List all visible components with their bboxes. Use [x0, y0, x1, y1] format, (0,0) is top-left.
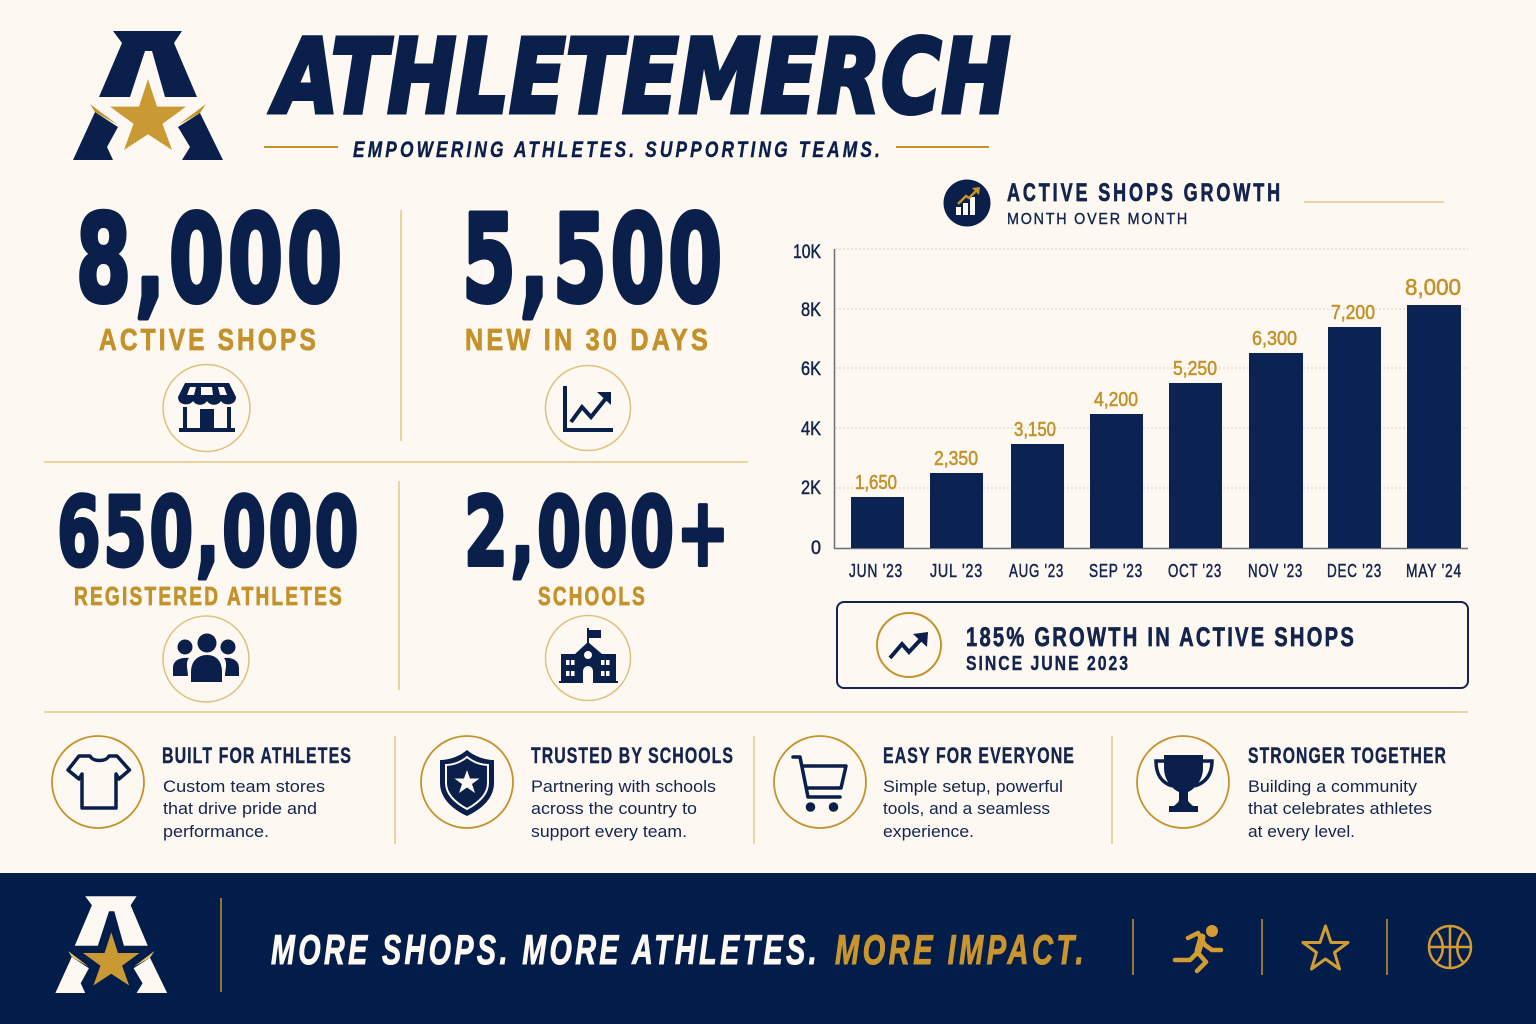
footer slogan: MORE IMPACT. [835, 926, 1087, 973]
stat: active shops: ACTIVE SHOPS [99, 322, 319, 357]
feature: easy for everyone: Simple setup, powerful [883, 777, 1063, 796]
bar chart: 0 [811, 538, 821, 559]
icon: people [173, 634, 239, 682]
feature: easy for everyone: experience. [883, 822, 974, 841]
bar chart: NOV '23 [1248, 561, 1303, 581]
icon: trophy [1156, 755, 1212, 812]
bar chart: 4,200 [1094, 389, 1138, 411]
feature: trusted by schools: Partnering with schools [531, 777, 716, 796]
callout: growth: 185% GROWTH IN ACTIVE SHOPS [966, 622, 1356, 652]
bar chart: 8K [801, 300, 821, 321]
icon: school building [559, 628, 618, 683]
bar chart: 2,350 [934, 448, 978, 470]
feature: trusted by schools: across the country to [531, 799, 697, 818]
icon: runner [1175, 925, 1221, 971]
feature: easy for everyone [774, 736, 1075, 841]
chart heading: ACTIVE SHOPS GROWTH [1007, 179, 1283, 207]
bar chart: 2K [801, 478, 821, 499]
callout: growth: SINCE JUNE 2023 [966, 653, 1130, 675]
bar chart: 6,300 [1252, 328, 1297, 350]
bar chart: 10K [793, 242, 821, 263]
bar chart: OCT '23 [1168, 561, 1222, 581]
stat: schools: SCHOOLS [538, 581, 647, 611]
feature: stronger together: at every level. [1248, 822, 1355, 841]
bar chart: 7,200 [1331, 302, 1375, 324]
stat: registered athletes: 650,000 [57, 478, 361, 588]
bar chart: 1,650 [855, 472, 897, 494]
bar chart: 6K [801, 359, 821, 380]
logo [73, 31, 223, 160]
feature: trusted by schools [421, 736, 734, 841]
bar chart: 4K [801, 419, 821, 440]
stat: new in 30 days [462, 191, 726, 450]
bar chart [793, 242, 1468, 581]
stat: new in 30 days: NEW IN 30 DAYS [465, 322, 711, 357]
bar chart: 8,000 [1405, 274, 1461, 300]
bar chart: JUN '23 [849, 561, 903, 581]
footer slogan: MORE SHOPS. MORE ATHLETES. [271, 926, 820, 973]
icon: basketball [1429, 926, 1471, 968]
stat: schools [464, 478, 732, 700]
stat: registered athletes: REGISTERED ATHLETES [74, 581, 344, 611]
icon: shield with star [440, 750, 494, 816]
bar chart: AUG '23 [1009, 561, 1064, 581]
stat: active shops [76, 191, 346, 452]
feature: built for athletes: that drive pride and [163, 799, 317, 818]
callout: growth [837, 602, 1468, 688]
icon: shopping cart [793, 757, 846, 812]
bar chart: 3,150 [1014, 419, 1056, 441]
chart heading: MONTH OVER MONTH [1007, 211, 1189, 228]
footer banner [0, 873, 1536, 1024]
bar chart: DEC '23 [1327, 561, 1382, 581]
stat: active shops: 8,000 [76, 191, 346, 330]
feature: stronger together [1137, 736, 1447, 841]
stat: new in 30 days: 5,500 [462, 191, 726, 330]
stat: registered athletes [57, 478, 361, 702]
icon: t-shirt [68, 756, 130, 808]
feature: built for athletes [52, 736, 352, 841]
feature: trusted by schools: TRUSTED BY SCHOOLS [531, 743, 734, 768]
feature: stronger together: Building a community [1248, 777, 1418, 796]
feature: built for athletes: Custom team stores [163, 777, 325, 796]
chart heading [944, 179, 1444, 228]
feature: trusted by schools: support every team. [531, 822, 687, 841]
tagline: EMPOWERING ATHLETES. SUPPORTING TEAMS. [353, 137, 883, 162]
feature: stronger together: STRONGER TOGETHER [1248, 743, 1447, 768]
bar chart: JUL '23 [930, 561, 983, 581]
icon: star outline [1303, 926, 1348, 969]
stat: schools: 2,000+ [464, 478, 732, 588]
footer logo [55, 896, 167, 993]
bar chart: SEP '23 [1089, 561, 1143, 581]
icon: growth chart [565, 386, 613, 430]
feature: built for athletes: performance. [163, 822, 269, 841]
title: ATHLETEMERCH [269, 18, 1011, 137]
icon: storefront [178, 383, 236, 432]
feature: stronger together: that celebrates athletes [1248, 799, 1432, 818]
feature: built for athletes: BUILT FOR ATHLETES [162, 743, 352, 768]
bar chart: MAY '24 [1406, 561, 1462, 581]
feature: easy for everyone: tools, and a seamless [883, 799, 1050, 818]
bar chart: 5,250 [1173, 358, 1217, 380]
feature: easy for everyone: EASY FOR EVERYONE [883, 743, 1075, 768]
